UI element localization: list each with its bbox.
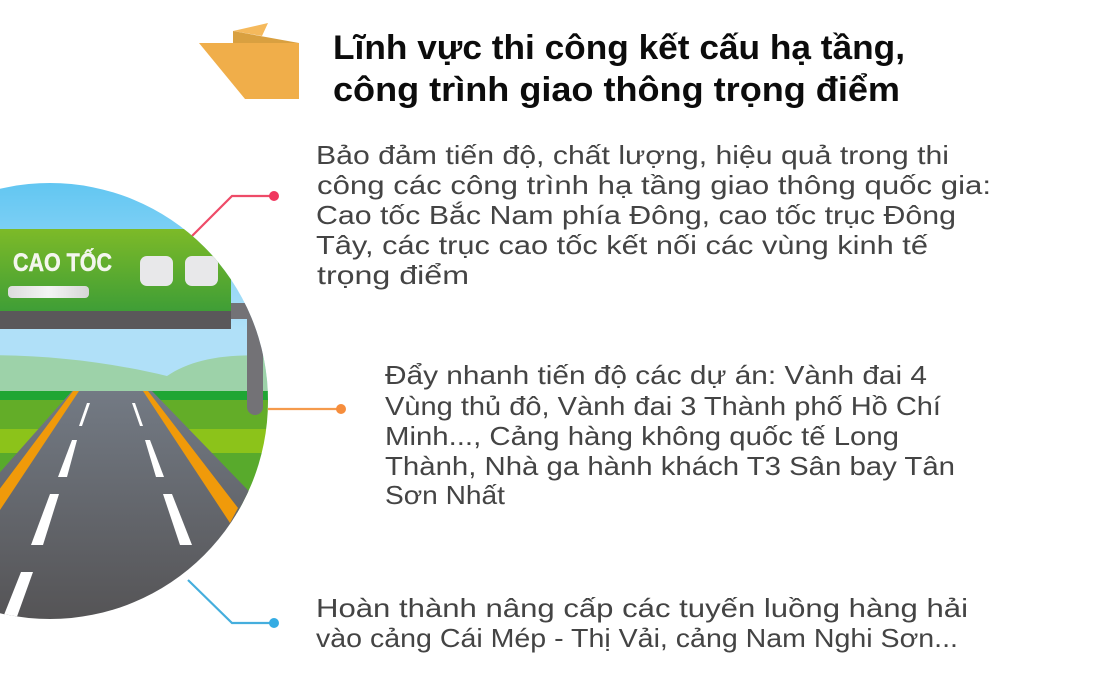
highway sign board: [0, 229, 231, 311]
text block: third item: [316, 593, 968, 653]
text block: second item: Đẩy nhanh tiến độ các dự án: Vành đai 4: [385, 360, 927, 390]
sign label: CAO TỐC: [13, 247, 112, 277]
lane dashes: [0, 403, 192, 625]
text block: second item: [385, 360, 955, 510]
text block: first item: công các công trình hạ tầng giao thông quốc gia:: [317, 170, 991, 200]
connector: blue line to third text: [188, 580, 279, 628]
connector: orange line to second text: [268, 404, 346, 414]
road: [0, 391, 248, 619]
hills: [0, 355, 270, 392]
orange road edges: [0, 391, 79, 510]
text block: third item: Hoàn thành nâng cấp các tuyến luồng hàng hải: [316, 593, 968, 623]
text block: second item: Thành, Nhà ga hành khách T3 Sân bay Tân: [385, 451, 955, 481]
circular highway illustration: [0, 183, 268, 619]
title: [333, 29, 905, 109]
text block: first item: Bảo đảm tiến độ, chất lượng, hiệu quả trong thi: [316, 140, 949, 170]
sky: [0, 180, 270, 395]
text block: first item: Tây, các trục cao tốc kết nối các vùng kinh tế: [316, 230, 929, 260]
text block: first item: [316, 140, 991, 290]
text block: second item: Vùng thủ đô, Vành đai 3 Thành phố Hồ Chí: [385, 391, 942, 421]
text block: second item: Sơn Nhất: [385, 480, 506, 510]
title: Lĩnh vực thi công kết cấu hạ tầng,: [333, 29, 905, 67]
icon: folded orange ribbon: [199, 23, 299, 99]
grass bands: [0, 391, 270, 513]
text block: first item: Cao tốc Bắc Nam phía Đông, cao tốc trục Đông: [316, 200, 956, 230]
text block: second item: Minh..., Cảng hàng không quốc tế Long: [385, 421, 899, 451]
connector: red line to first text: [192, 191, 279, 236]
sign post: [225, 311, 255, 407]
text block: third item: vào cảng Cái Mép - Thị Vải, cảng Nam Nghi Sơn...: [316, 623, 958, 653]
text block: first item: trọng điểm: [317, 260, 469, 290]
title: công trình giao thông trọng điểm: [333, 71, 900, 109]
